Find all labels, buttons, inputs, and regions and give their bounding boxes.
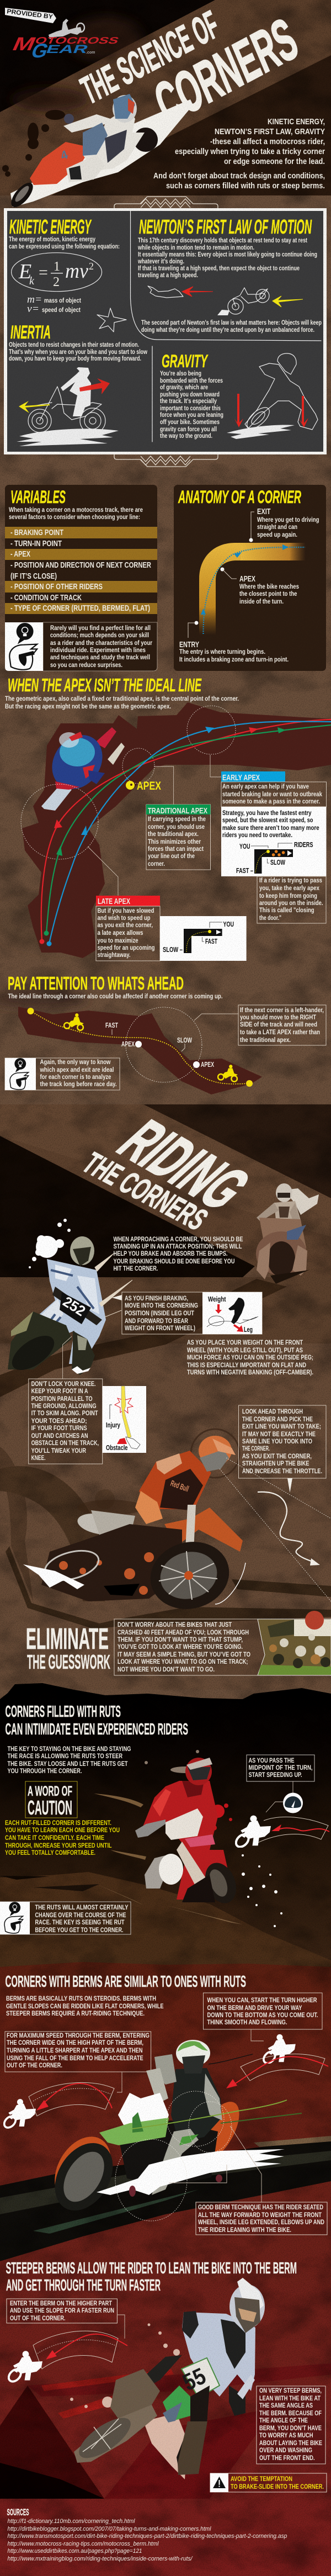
callout: don't worry about crashes, with photo: THEM. IF YOU DON’T WANT TO HIT THAT STUMP,: [118, 1636, 243, 1643]
tip box: analyze the track: which apex and exit are ideal: [40, 1066, 114, 1073]
callout: late apex: [88, 847, 247, 961]
injury diagram: [103, 1386, 146, 1453]
callout: as you pass the midpoint: [247, 1755, 314, 1812]
entry label: The entry is where turning begins.: [179, 648, 265, 655]
callout: maximum speed through the berm: OUT OF THE CORNER.: [7, 2061, 62, 2069]
exit label: speed up again.: [257, 531, 297, 538]
callout: don't worry about crashes, with photo: NOT WHERE YOU DON’T WANT TO GO.: [118, 1665, 215, 1673]
callout: finish braking with weight diagram: WEIGHT ON FRONT WHEEL): [125, 1324, 195, 1332]
callout: late apex: and wish to speed up: [97, 914, 150, 922]
black section: [0, 1683, 331, 1962]
track labels: APEX: [201, 1060, 214, 1069]
gravity block: of gravity, which are: [160, 384, 208, 391]
variables striped list: - CONDITION OF TRACK: [10, 594, 82, 602]
callout: finish braking with weight diagram: AND FORWARD TO BEAR: [125, 1317, 188, 1325]
apex label: Where the bike reaches: [239, 583, 299, 590]
decoration: chevron badge behind chalkboard: [114, 197, 218, 467]
variables striped list: [5, 527, 157, 614]
callout: traditional apex: forces that can impact: [148, 845, 204, 853]
text: berms are ruts on steroids: STEEPER BERMS REQUIRE A RUT-RIDING TECHNIQUE.: [6, 2009, 145, 2017]
gravity block: [160, 351, 223, 440]
drawing: rider thrown forward with red arrow: [148, 286, 213, 298]
dashed circle: [126, 1007, 202, 1082]
inertia block: down, you have to keep your body from moving forward.: [9, 356, 141, 362]
text: weight on front wheel: [187, 1339, 313, 1376]
callout: enter the berm on the higher part: AND USE THE SLOPE FOR A FASTER RUN: [10, 2307, 114, 2314]
brand: Motocross Gear logo: EAR: [44, 43, 90, 56]
illustration: orange rider: Red Bull: [169, 1479, 190, 1494]
weight diagram: Leg: [244, 1325, 253, 1334]
illustration: white rider number 55: [70, 2278, 265, 2479]
track labels: [105, 1021, 214, 1069]
brand: Motocross Gear logo: G: [28, 39, 52, 62]
diagram: high berm line: [226, 2034, 328, 2088]
callout: don't lock your knee: [29, 1379, 146, 1464]
callout: early apex: [210, 755, 327, 923]
callout: look ahead through the corner: STRAIGHTEN UP THE BIKE: [242, 1459, 309, 1467]
dotted line: [31, 1011, 249, 1084]
callout: start the turn higher: [203, 1993, 322, 2041]
diagram: late apex: YOU: [223, 920, 234, 928]
variables heading: When taking a corner on a motocross track, there are: [9, 506, 143, 514]
callout: avoid brake-slide warning: [210, 2473, 327, 2492]
variables striped list: - TURN-IN POINT: [10, 539, 62, 548]
tip box: analyze the track: [5, 1058, 120, 1090]
variables heading: [9, 487, 143, 521]
track labels: FAST: [105, 1021, 118, 1029]
heading: corners filled with ruts: CORNERS FILLED WITH RUTS: [6, 1703, 121, 1721]
callout: start the turn higher: THINK SMOOTH AND FLOWING.: [207, 2018, 287, 2026]
equation legend: m=: [27, 294, 42, 305]
kinetic energy equation: mv: [65, 260, 88, 283]
callout: look ahead through the corner: AS YOU EXIT THE CORNER,: [242, 1452, 312, 1460]
callout: look ahead through the corner: SAME LINE YOU TOOK INTO: [242, 1437, 312, 1445]
text: ruts steer the bike: THE KEY TO STAYING ON THE BIKE AND STAYING: [8, 1745, 131, 1753]
illustration: rider 252 white and blue: [6, 1219, 132, 1379]
text: approaching a corner: YOUR BRAKING SHOULD BE DONE BEFORE YOU: [114, 1257, 235, 1265]
callout: late apex: a late apex allows: [97, 929, 143, 937]
callout: on very steep berms: TO WORRY AS MUCH: [259, 2431, 313, 2439]
variables striped list: (IF IT’S CLOSE): [10, 572, 57, 581]
illustration: cornering rider with white dirt streak: 4: [58, 147, 70, 163]
callout: don't lock your knee: OUT AND CATCHES AN: [31, 1432, 88, 1440]
heading: when the apex isn't the ideal line: [5, 675, 239, 710]
tip box: ruts change: [0, 1902, 131, 1934]
line of sight dashes and exit arrow: [220, 1458, 331, 1601]
callout: don't lock your knee: YOUR TOES AHEAD;: [31, 1417, 87, 1425]
heading: pay attention to whats ahead: [8, 973, 223, 1000]
brand: Motocross Gear logo: [9, 19, 121, 62]
exit label: straight and can: [257, 523, 297, 531]
race photo: [258, 1611, 331, 1675]
callout: maximum speed through the berm: [5, 2032, 151, 2092]
chalk divider around Newton block: [130, 211, 321, 341]
variables striped list: - APEX: [10, 550, 30, 559]
callout: traditional apex: [146, 766, 211, 870]
diagram: late apex: FAST: [205, 937, 217, 945]
inertia block: [9, 322, 147, 362]
kinetic energy equation: =: [39, 263, 48, 282]
callout: don't lock your knee: THE GROUND, ALLOWING: [31, 1402, 97, 1410]
apex label: inside of the turn.: [239, 597, 284, 605]
text: berms are ruts on steroids: [6, 1995, 164, 2017]
tip box: experiment with lines: [5, 622, 157, 671]
kinetic energy equation: [12, 253, 102, 292]
dashed apex circles: [21, 706, 236, 859]
callout: early apex: to keep him from going: [259, 892, 317, 900]
track brush: S-curve diagram: [18, 1007, 262, 1094]
sources list: http://www.mxtrainingblog.com/riding-techniques/inside-corners-with-ruts/: [8, 2556, 193, 2562]
variables striped list: - BRAKING POINT: [10, 528, 63, 537]
diagram: early apex riders: [236, 840, 313, 875]
callout: enter the berm on the higher part: ENTER THE BERM ON THE HIGHER PART: [10, 2299, 113, 2307]
callout: late apex: straightaway.: [97, 951, 130, 959]
callout: finish braking with weight diagram: AS YOU FINISH BRAKING,: [125, 1294, 188, 1302]
tip box: experiment with lines: as a rider and the characteristics of your: [50, 639, 152, 647]
kinetic energy block: The energy of motion, kinetic energy: [9, 236, 95, 243]
brand: Motocross Gear logo: .com: [86, 51, 95, 55]
gravity block: You’re also being: [160, 371, 201, 377]
sources list: http://www.transmotosport.com/dirt-bike-riding-techniques-part-2/dirtbike-riding-techniques-part-2-cornering.asp: [8, 2533, 287, 2540]
callout: as you pass the midpoint: MIDPOINT OF THE TURN,: [248, 1764, 312, 1771]
tip box: experiment with lines: and techniques and study the track well: [50, 653, 150, 661]
sources list: [7, 2507, 287, 2562]
callout: don't worry about crashes, with photo: [114, 1611, 331, 1675]
apex marker: [126, 780, 161, 792]
newton heading and text: while objects in motion tend to remain in motion.: [137, 245, 254, 251]
diagram: rut exit arc with red arrow: [233, 1816, 329, 1849]
illustration: cornering rider with white dirt streak: [2, 94, 193, 210]
callout: early apex: you, take the early apex: [259, 884, 319, 892]
text: ruts steer the bike: [8, 1745, 131, 1775]
callout: avoid brake-slide warning: AVOID THE TEMPTATION: [231, 2475, 292, 2483]
brand: Motocross Gear logo: OTOCROSS: [33, 35, 121, 46]
tip box: analyze the track: Again, the only way to know: [40, 1058, 111, 1066]
kinetic energy equation: E: [18, 260, 31, 283]
callout: don't lock your knee: KNEE.: [31, 1454, 46, 1462]
variables striped list: - POSITION OF OTHER RIDERS: [10, 583, 103, 591]
bikes: [64, 1013, 84, 1030]
track brush: maroon corner: [22, 702, 331, 958]
drawing: inertia chalk bike: [17, 367, 119, 446]
tip box: ruts change: THE RUTS WILL ALMOST CERTAINLY: [35, 1903, 129, 1911]
callout: a word of caution: A WORD OF: [28, 1784, 72, 1799]
illustration: rider 252 white and blue: 252: [60, 1293, 88, 1319]
callout: traditional apex: This minimizes other: [148, 838, 201, 845]
callout: late apex: LATE APEX: [98, 897, 130, 906]
corner track with dotted racing line: [199, 543, 306, 635]
tip box: analyze the track: the track long before race day.: [40, 1080, 117, 1088]
entry label: [179, 621, 289, 663]
callout: look ahead through the corner: [238, 1405, 326, 1493]
entry label: ENTRY: [179, 640, 199, 649]
newton heading and text: traveling at a high speed.: [138, 272, 198, 279]
text: weight on front wheel: WHEEL (WITH YOUR LEG STILL OUT), PUT AS: [187, 1346, 303, 1354]
panel: variables: [5, 485, 157, 671]
callout: traditional apex: corner, you should use: [148, 823, 205, 831]
intro text: [153, 117, 325, 191]
callout: late apex: as you exit the corner,: [97, 921, 153, 929]
text: ruts steer the bike: YOU THROUGH THE CORNER.: [8, 1767, 82, 1775]
icon: speedometer gauge: [283, 1792, 303, 1813]
diagram: early apex riders: FAST –: [236, 866, 253, 875]
text: berms are ruts on steroids: GENTLE SLOPES CAN BE RIDDEN LIKE FLAT CORNERS, WHILE: [6, 2002, 164, 2010]
callout: a word of caution: [5, 1781, 120, 1856]
heading: corners filled with ruts: [6, 1703, 188, 1738]
heading: steeper berms: AND GET THROUGH THE TURN FASTER: [6, 2277, 161, 2294]
apex marker: APEX: [137, 780, 161, 792]
callout: don't lock your knee: IF YOUR FOOT TURNS: [31, 1424, 87, 1432]
gravity block: the way to the ground.: [160, 433, 212, 440]
kinetic energy block: [9, 215, 120, 250]
brand: provided-by tag: [5, 8, 56, 23]
callout: on very steep berms: THE ANGLE OF THE: [259, 2416, 308, 2424]
heading: Riding the Corners: [76, 1109, 265, 1236]
callout: early apex: An early apex can help if you have: [222, 782, 309, 790]
drawing: leaning rider with red gravity arrows: [227, 353, 318, 439]
kinetic energy equation: 2: [89, 261, 94, 272]
diagram: early apex riders: SLOW: [270, 858, 286, 866]
diagram: late apex: SLOW –: [163, 945, 183, 954]
gravity block: GRAVITY: [162, 351, 209, 371]
callout: don't lock your knee: YOU’LL TWEAK YOUR: [31, 1447, 86, 1454]
red section: [0, 1962, 331, 2576]
callout: finish braking with weight diagram: POSITION (INSIDE LEG OUT: [125, 1309, 195, 1317]
equation legend: [27, 294, 81, 315]
track labels: SLOW: [177, 1036, 193, 1044]
injury diagram: Injury: [106, 1421, 121, 1429]
heading: Riding the Corners: THE CORNERS: [76, 1146, 215, 1236]
variables heading: several factors to consider when choosing your line:: [9, 513, 140, 521]
callout: maximum speed through the berm: USING THE FALL OF THE BERM TO HELP ACCELERATE: [7, 2054, 143, 2062]
callout: don't worry about crashes, with photo: CRASHED 40 FEET AHEAD OF YOU; LOOK THROUGH: [118, 1628, 249, 1636]
text: approaching a corner: WHEN APPROACHING A CORNER, YOU SHOULD BE: [114, 1235, 243, 1243]
callout: good berm technique: THE RIDER LEANING WITH THE BIKE.: [198, 2226, 291, 2234]
callout: early apex: EARLY APEX: [222, 773, 260, 782]
heading: when the apex isn't the ideal line: But the racing apex might not be the same as the geometric apex.: [5, 702, 171, 710]
callout: early apex: the door.": [259, 914, 281, 922]
apex label: APEX: [239, 574, 255, 584]
text: approaching a corner: HIT THE CORNER.: [114, 1265, 158, 1272]
text: ruts steer the bike: THE RACE IS ALLOWING THE RUTS TO STEER: [8, 1752, 122, 1760]
callout: traditional apex: your line out of the: [148, 852, 195, 860]
callout: a word of caution: EACH RUT-FILLED CORNER IS DIFFERENT.: [5, 1819, 111, 1827]
gravity block: pushing you down toward: [160, 392, 220, 398]
tip box: experiment with lines: individual ride. Experiment with lines: [50, 646, 146, 654]
gravity block: the track. It’s especially: [160, 398, 217, 405]
weight diagram: Weight: [208, 1295, 226, 1303]
callout: as you pass the midpoint: START SPEEDING UP.: [248, 1771, 302, 1779]
callout: traditional apex: TRADITIONAL APEX: [148, 806, 207, 816]
tip box: experiment with lines: conditions; much depends on your skill: [50, 631, 149, 639]
callout: a word of caution: THROUGH, INCREASE YOUR SPEED UNTIL: [5, 1842, 112, 1849]
illustration: orange rider: [23, 1429, 245, 1618]
weight diagram: [207, 1295, 258, 1334]
eliminate the guesswork heading: ELIMINATE: [26, 1622, 109, 1655]
text: approaching a corner: [114, 1235, 243, 1272]
heading: pay attention to whats ahead: PAY ATTENTION TO WHATS AHEAD: [8, 973, 184, 993]
callout: look ahead through the corner: LOOK AHEAD THROUGH: [242, 1408, 303, 1415]
variables heading: VARIABLES: [10, 487, 66, 507]
callout: finish braking with weight diagram: [112, 1292, 262, 1334]
callout: a word of caution: CAN TAKE IT CONFIDENTLY. EACH TIME: [5, 1834, 104, 1842]
tip box: ruts change: BEFORE YOU GET TO THE CORNER.: [35, 1926, 124, 1934]
equation legend: speed of object: [42, 307, 81, 314]
apex label: the closest point to the: [239, 590, 297, 597]
gravity block: important to consider this: [160, 405, 221, 412]
equation legend: mass of object: [44, 298, 81, 304]
callout: start the turn higher: ON THE BERM AND DRIVE YOUR WAY: [207, 2004, 302, 2012]
callout: look ahead through the corner: THE CORNER.: [242, 1445, 270, 1452]
tip box: ruts change: RACE. THE KEY IS SEEING THE RUT: [35, 1918, 125, 1926]
callout: on very steep berms: [257, 2386, 325, 2464]
newton heading and text: [137, 215, 317, 279]
kinetic energy equation: 2: [53, 275, 60, 289]
callout: maximum speed through the berm: THE CORNER WIDE ON THE HIGH PART OF THE BERM,: [7, 2039, 143, 2046]
drawing: chalk bike with yellow arrow: [217, 288, 303, 315]
callout: enter the berm on the higher part: OUT OF THE CORNER.: [10, 2314, 66, 2322]
callout: don't worry about crashes, with photo: YOU’VE GOT TO LOOK AT WHERE YOU’RE GOING.: [118, 1643, 243, 1651]
kinetic energy equation: 1: [54, 260, 60, 274]
kinetic energy block: KINETIC ENERGY: [9, 215, 92, 238]
chalk divider: [152, 346, 153, 442]
equation legend: v=: [27, 303, 39, 315]
callout: early apex: This is called "closing: [259, 906, 314, 914]
tip box: analyze the track: for each corner is to analyze: [40, 1073, 111, 1081]
racing lines: red, green, blue: [40, 720, 331, 946]
diagram: steep berm line: [6, 2331, 127, 2384]
callout: don't worry about crashes, with photo: LOOK AT WHERE YOU WANT TO GO ON THE TRACK;: [118, 1658, 248, 1665]
callout: a word of caution: YOU FEEL TOTALLY COMFORTABLE.: [5, 1849, 95, 1856]
illustration: green rider on berm: [43, 2040, 302, 2221]
icon: chalk star: [97, 308, 126, 332]
text: weight on front wheel: AS YOU PLACE YOUR WEIGHT ON THE FRONT: [187, 1339, 303, 1346]
brand: Motocross Gear logo: M: [9, 33, 40, 55]
text: ruts steer the bike: THE BIKE. STAY LOOSE AND LET THE RUTS GET: [8, 1760, 128, 1768]
callout: late apex: you to maximize: [97, 937, 138, 944]
callout: late apex: speed for an upcoming: [97, 944, 154, 951]
brand: provided-by tag: PROVIDED BY: [7, 8, 54, 20]
panel: chalkboard physics: [4, 208, 327, 454]
callout: don't worry about crashes, with photo: DON’T WORRY ABOUT THE BIKES THAT JUST: [118, 1621, 232, 1628]
callout: don't lock your knee: OBSTACLE ON THE TRACK,: [31, 1439, 99, 1447]
callout: maximum speed through the berm: FOR MAXIMUM SPEED THROUGH THE BERM, ENTERING: [7, 2032, 150, 2039]
text: approaching a corner: HELP YOU BRAKE AND ABSORB THE BUMPS.: [114, 1250, 227, 1257]
callout: don't lock your knee: IT TO SKIM ALONG. POINT: [31, 1409, 98, 1417]
diagram: early apex riders: RIDERS: [294, 840, 313, 849]
entry label: It includes a braking zone and turn-in point.: [179, 655, 289, 663]
diagram: wide berm line: [2, 2082, 114, 2130]
callout: traditional apex: the traditional apex.: [148, 830, 199, 838]
callout: early apex: Strategy, you have the fastest entry: [222, 809, 312, 817]
sources list: SOURCES: [7, 2507, 29, 2517]
sources list: http://www.motocross-racing-tips.com/motocross_berm.html: [8, 2541, 159, 2547]
newton heading and text: whatever it’s doing.: [137, 258, 184, 265]
text: berms are ruts on steroids: BERMS ARE BASICALLY RUTS ON STEROIDS. BERMS WITH: [6, 1995, 156, 2002]
second part of Newton's law text: [141, 320, 322, 334]
panel: anatomy of a corner: [174, 485, 326, 671]
gravity block: force when you are leaning: [160, 412, 223, 419]
illustration: brown rider front view: [256, 1183, 319, 1284]
callout: next corner left-hander: the traditional apex.: [240, 1036, 291, 1044]
callout: a word of caution: YOU HAVE TO LEARN EACH ONE BEFORE YOU: [5, 1826, 120, 1834]
callout: on very steep berms: OVER AND WASHING: [259, 2446, 312, 2454]
callout: on very steep berms: THE SAME ANGLE AS: [259, 2402, 313, 2409]
gravity block: bombarded with the forces: [160, 378, 223, 384]
callout: good berm technique: [196, 2202, 327, 2235]
callout: don't lock your knee: DON’T LOCK YOUR KNEE.: [31, 1380, 96, 1388]
gravity block: off your bike. Sometimes: [160, 419, 220, 426]
callout: next corner left-hander: [194, 1005, 326, 1045]
exit label: [249, 507, 319, 542]
heading: when the apex isn't the ideal line: The geometric apex, also called a fixed or traditional apex, is the central point of the corner.: [5, 695, 239, 702]
exit label: EXIT: [257, 507, 270, 516]
apex label: [221, 568, 299, 605]
inertia block: Objects tend to resist changes in their states of motion.: [9, 342, 139, 348]
callout: look ahead through the corner: THE CORNER AND PICK THE: [242, 1415, 313, 1423]
text: THE GUESSWORK: [27, 1651, 110, 1673]
inertia block: That’s why when you are on your bike and you start to slow: [9, 349, 147, 356]
callout: don't worry about crashes, with photo: IT MAY SEEM A SIMPLE THING, BUT YOU’VE GOT TO: [118, 1651, 250, 1658]
tip box: experiment with lines: Rarely will you find a perfect line for all: [50, 624, 151, 632]
tip box: ruts change: CHANGE OVER THE COURSE OF THE: [35, 1911, 126, 1919]
diagram: early apex riders: YOU: [239, 842, 250, 850]
sources list: http://f1-dictionary.110mb.com/cornering_tech.html: [8, 2518, 135, 2525]
heading: pay attention to whats ahead: The ideal line through a corner also could be affected if another corner is coming up.: [8, 992, 223, 1000]
eliminate the guesswork heading: [26, 1622, 110, 1673]
heading: steeper berms: [6, 2260, 297, 2294]
callout: a word of caution: CAUTION: [28, 1796, 72, 1819]
callout: don't lock your knee: POSITION PARALLEL TO: [31, 1395, 93, 1403]
callout: maximum speed through the berm: TURNING A LITTLE SHARPER AT THE APEX AND THEN: [7, 2046, 142, 2054]
callout: enter the berm on the higher part: [7, 2299, 125, 2339]
text: approaching a corner: STANDING UP IN AN ATTACK POSITION; THIS WILL: [114, 1242, 242, 1250]
callout: on very steep berms: OUT THE FRONT END.: [259, 2454, 315, 2462]
injury diagram: Obstacle: [106, 1443, 128, 1452]
illustration: red rider in ruts: [94, 1750, 282, 1927]
kinetic energy equation: k: [29, 275, 35, 287]
callout: traditional apex: corner.: [148, 860, 165, 868]
kinetic energy block: can be expressed using the following equation:: [9, 244, 120, 250]
diagram: late apex: [163, 920, 234, 954]
sources list: http://dirtbikeblogger.blogspot.com/2007/07/taking-turns-and-making-corners.html: [8, 2526, 211, 2532]
track labels: APEX: [121, 1040, 135, 1048]
variables striped list: - TYPE OF CORNER (RUTTED, BERMED, FLAT): [10, 604, 150, 613]
callout: as you pass the midpoint: AS YOU PASS THE: [248, 1757, 295, 1764]
callout: early apex: riders you need to overtake.: [222, 831, 292, 839]
callout: late apex: But if you have slowed: [97, 907, 154, 914]
illustration: white rider number 55: 55: [179, 2363, 210, 2395]
callout: finish braking with weight diagram: MOVE INTO THE CORNERING: [125, 1302, 198, 1309]
variables striped list: - POSITION AND DIRECTION OF NEXT CORNER: [10, 561, 151, 570]
gravity block: gravity can force you all: [160, 426, 217, 433]
callout: traditional apex: If carrying speed in the: [148, 815, 206, 823]
tip box: experiment with lines: so you can reduce surprises.: [50, 661, 122, 669]
sources list: http://www.useddirtbikes.com.au/pages.php?page=121: [8, 2548, 142, 2554]
illustration: top-view rider: [41, 725, 125, 811]
callout: don't lock your knee: KEEP YOUR FOOT IN A: [31, 1387, 88, 1395]
inertia block: INERTIA: [10, 322, 51, 343]
